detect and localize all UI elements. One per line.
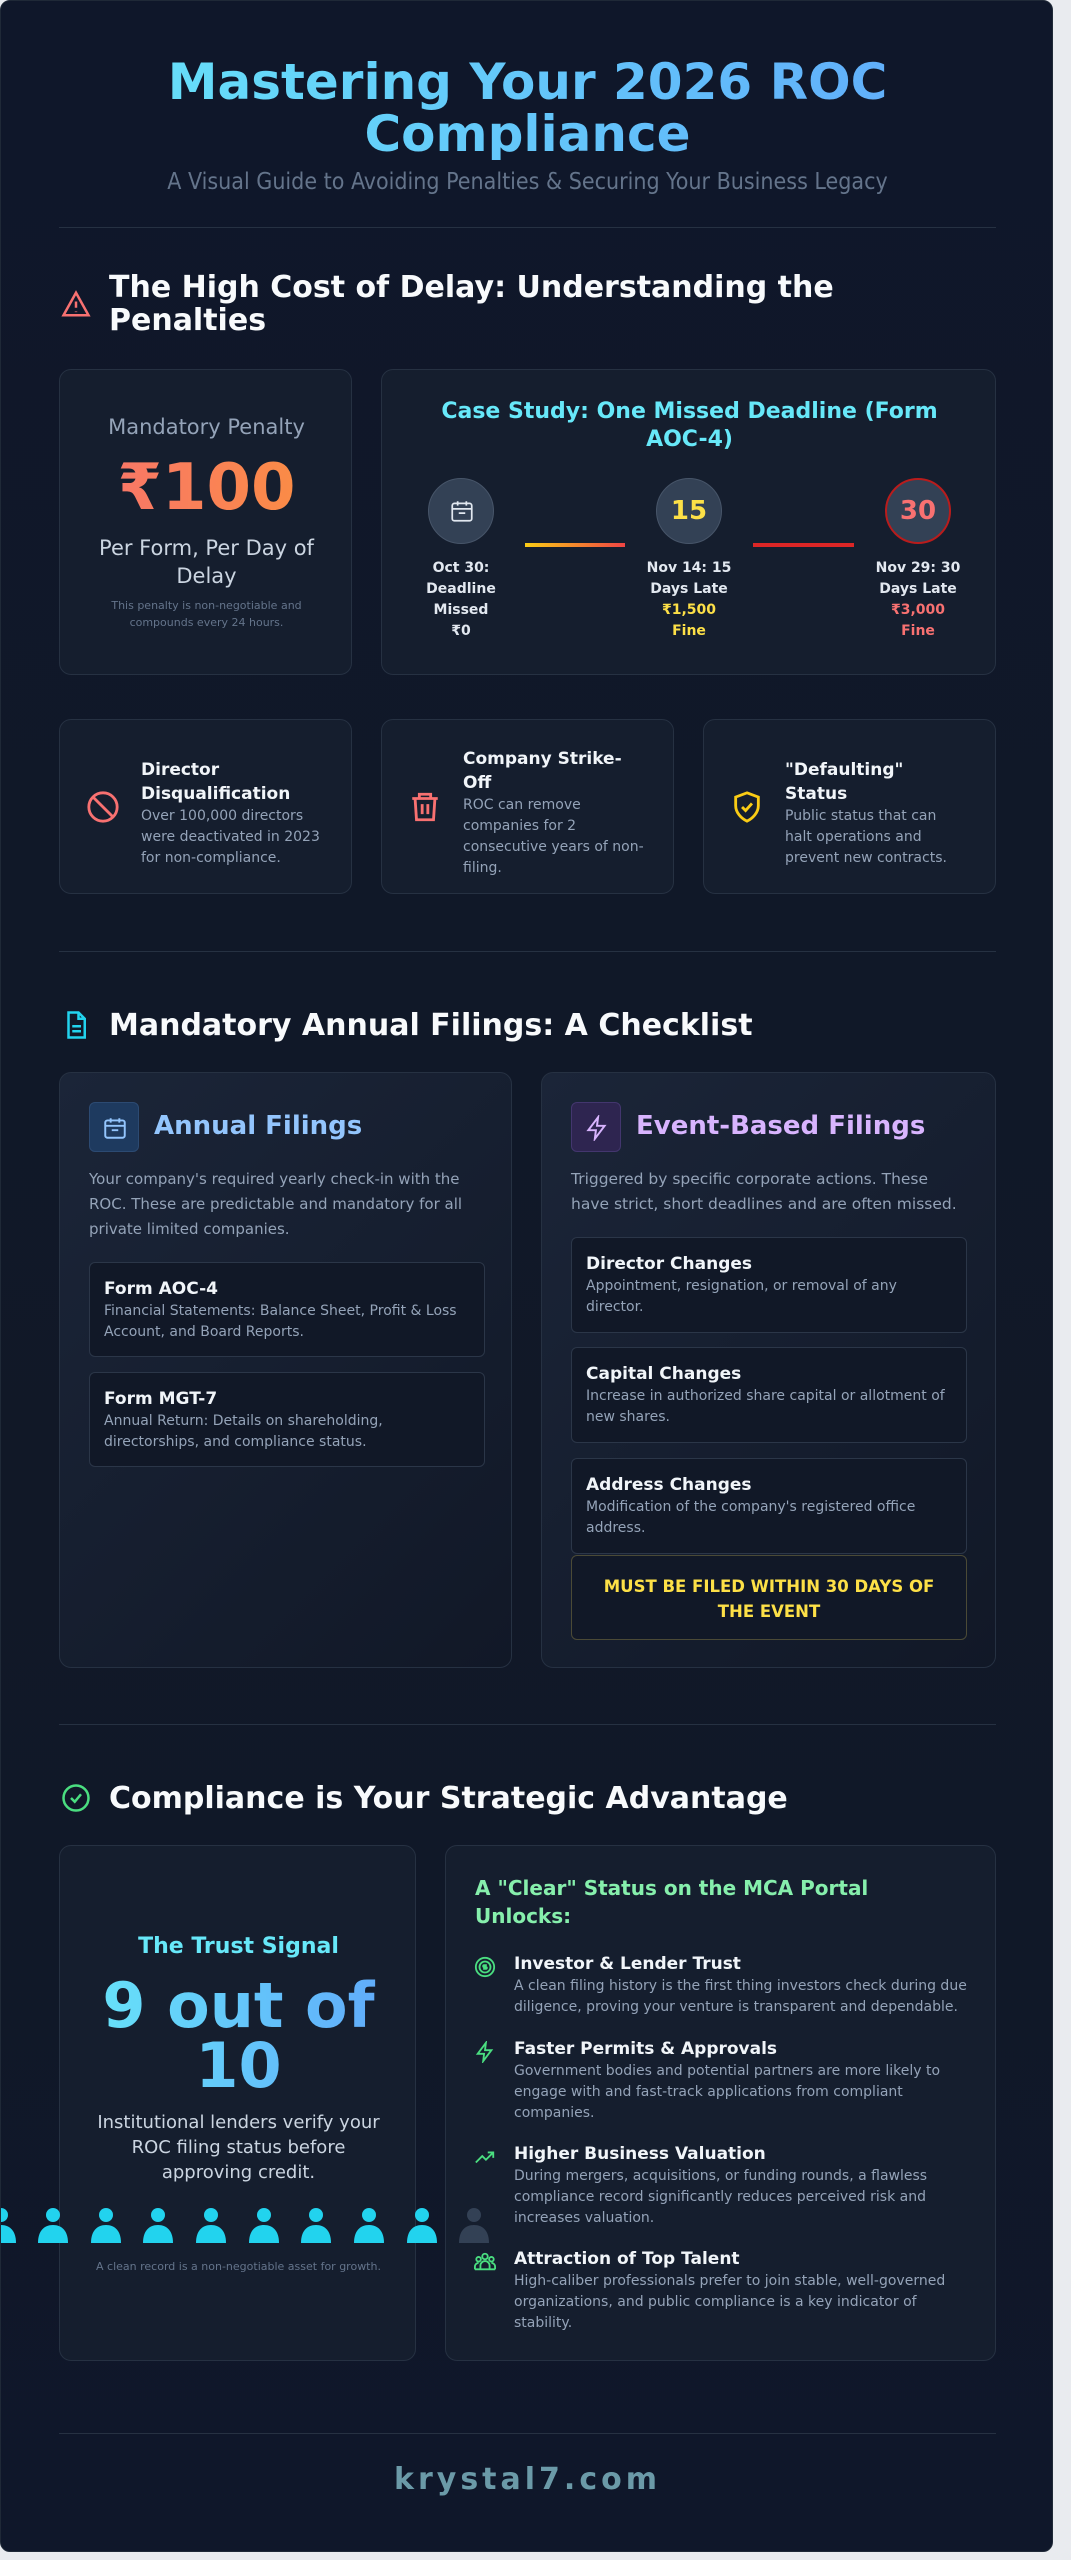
timeline: ₹0 bbox=[451, 623, 471, 639]
timeline: Oct 30: Deadline Missed bbox=[426, 560, 496, 618]
panel: director disqualification: Director Disqualification bbox=[141, 760, 290, 804]
panel: benefits: A "Clear" Status on the MCA Portal Unlocks: bbox=[475, 1876, 868, 1928]
panel: defaulting status bbox=[703, 719, 996, 894]
timeline: 15 bbox=[671, 496, 707, 526]
panel: mandatory penalty: ₹100 bbox=[117, 451, 296, 525]
timeline: Fine bbox=[901, 623, 935, 639]
icon row: people bbox=[1, 2208, 489, 2243]
heading: filings: Mandatory Annual Filings: A Checklist bbox=[109, 1008, 753, 1043]
panel: event-based filings: Appointment, resignation, or removal of any director. bbox=[586, 1278, 897, 1315]
callout: 30 days: MUST BE FILED WITHIN 30 DAYS OF THE EVENT bbox=[604, 1577, 934, 1621]
title bbox=[1, 56, 1054, 160]
benefit: investor trust: A clean filing history is the first thing investors check during due diligence, proving your venture is transparent and dependable. bbox=[514, 1978, 967, 2015]
panel: mandatory penalty: Mandatory Penalty bbox=[108, 415, 305, 439]
benefit: permits bbox=[476, 2039, 940, 2121]
timeline: ₹1,500 bbox=[662, 602, 716, 618]
panel: case study bbox=[381, 369, 996, 675]
timeline: Nov 14: 15 Days Late bbox=[647, 560, 731, 597]
panel: trust signal bbox=[59, 1845, 416, 2361]
panel: trust signal: A clean record is a non-negotiable asset for growth. bbox=[96, 2260, 381, 2273]
panel: trust signal: The Trust Signal bbox=[138, 1934, 339, 1959]
benefit: valuation bbox=[475, 2144, 927, 2226]
benefit: permits: Faster Permits & Approvals bbox=[514, 2039, 777, 2059]
panel: strike-off: ROC can remove companies for 2 consecutive years of non-filing. bbox=[463, 797, 644, 876]
heading: penalties: Penalties bbox=[109, 303, 266, 338]
panel: event-based filings: Increase in authorized share capital or allotment of new shares. bbox=[586, 1388, 945, 1425]
panel: trust signal: 9 out of bbox=[102, 1969, 375, 2042]
panel: mandatory penalty: This penalty is non-negotiable and compounds every 24 hours. bbox=[111, 599, 302, 629]
panel: trust signal: Institutional lenders verify your ROC filing status before approving credit. bbox=[97, 2112, 380, 2183]
panel: annual filings: Form AOC-4 bbox=[104, 1279, 218, 1299]
panel: defaulting status: Public status that can halt operations and prevent new contracts. bbox=[785, 808, 947, 866]
benefit: talent bbox=[474, 2249, 945, 2331]
panel: strike-off: Company Strike-Off bbox=[463, 749, 622, 793]
panel: case study: Case Study: One Missed Deadline (Form AOC-4) bbox=[441, 399, 938, 452]
panel: mandatory penalty: Per Form, Per Day of Delay bbox=[99, 536, 314, 588]
panel: event-based filings: Address Changes bbox=[586, 1475, 752, 1495]
icon: warning bbox=[61, 290, 91, 316]
panel: event-based filings: Capital Changes bbox=[586, 1364, 741, 1384]
panel: annual filings: Annual Return: Details on shareholding, directorships, and compliance status. bbox=[104, 1413, 383, 1450]
benefit: talent: High-caliber professionals prefer to join stable, well-governed organizations, and public compliance is a key indicator of stability. bbox=[514, 2273, 945, 2331]
benefit: talent: Attraction of Top Talent bbox=[514, 2249, 740, 2269]
title: Compliance bbox=[364, 105, 691, 163]
benefit: valuation: Higher Business Valuation bbox=[514, 2144, 766, 2164]
icon: check circle bbox=[62, 1784, 90, 1812]
footer: brand: krystal7.com bbox=[394, 2462, 661, 2497]
panel: strike-off bbox=[381, 719, 674, 894]
panel: annual filings: Form MGT-7 bbox=[104, 1389, 217, 1409]
timeline bbox=[426, 478, 960, 639]
panel: annual filings: Financial Statements: Balance Sheet, Profit & Loss Account, and Board Reports. bbox=[104, 1303, 457, 1340]
panel: annual filings: Your company's required yearly check-in with the ROC. These are predictable and mandatory for all private limited companies. bbox=[89, 1170, 462, 1238]
panel: event-based filings: Triggered by specific corporate actions. These have strict, short deadlines and are often missed. bbox=[571, 1170, 957, 1213]
subtitle: A Visual Guide to Avoiding Penalties & Securing Your Business Legacy bbox=[167, 169, 888, 195]
title: Mastering Your 2026 ROC bbox=[168, 53, 887, 111]
panel: annual filings: Annual Filings bbox=[154, 1111, 362, 1141]
benefit: investor trust: Investor & Lender Trust bbox=[514, 1954, 741, 1974]
icon: document bbox=[67, 1011, 86, 1039]
panel: director disqualification bbox=[59, 719, 352, 894]
panel: defaulting status: "Defaulting" Status bbox=[785, 760, 903, 804]
benefit: valuation: During mergers, acquisitions, or funding rounds, a flawless compliance record significantly reduces perceived risk and increases valuation. bbox=[514, 2168, 927, 2226]
benefit: investor trust bbox=[474, 1954, 967, 2015]
heading: penalties bbox=[109, 270, 834, 338]
benefit: permits: Government bodies and potential partners are more likely to engage with and fast-track applications from compliant companies. bbox=[514, 2063, 940, 2121]
panel: annual filings bbox=[59, 1072, 512, 1668]
timeline: Nov 29: 30 Days Late bbox=[876, 560, 960, 597]
panel: event-based filings: Modification of the company's registered office address. bbox=[586, 1499, 915, 1536]
panel: event-based filings bbox=[541, 1072, 996, 1668]
panel: event-based filings: Event-Based Filings bbox=[636, 1111, 925, 1141]
heading: advantage: Compliance is Your Strategic Advantage bbox=[109, 1781, 788, 1816]
callout: 30 days bbox=[571, 1555, 967, 1640]
heading: penalties: The High Cost of Delay: Understanding the bbox=[109, 270, 834, 305]
panel: director disqualification: Over 100,000 directors were deactivated in 2023 for non-compliance. bbox=[141, 808, 320, 866]
timeline: Fine bbox=[672, 623, 706, 639]
panel: mandatory penalty bbox=[59, 369, 352, 675]
timeline: 30 bbox=[900, 496, 936, 526]
timeline: ₹3,000 bbox=[891, 602, 945, 618]
panel: event-based filings: Director Changes bbox=[586, 1254, 752, 1274]
panel: benefits bbox=[445, 1845, 996, 2361]
panel: trust signal: 10 bbox=[195, 2029, 282, 2102]
